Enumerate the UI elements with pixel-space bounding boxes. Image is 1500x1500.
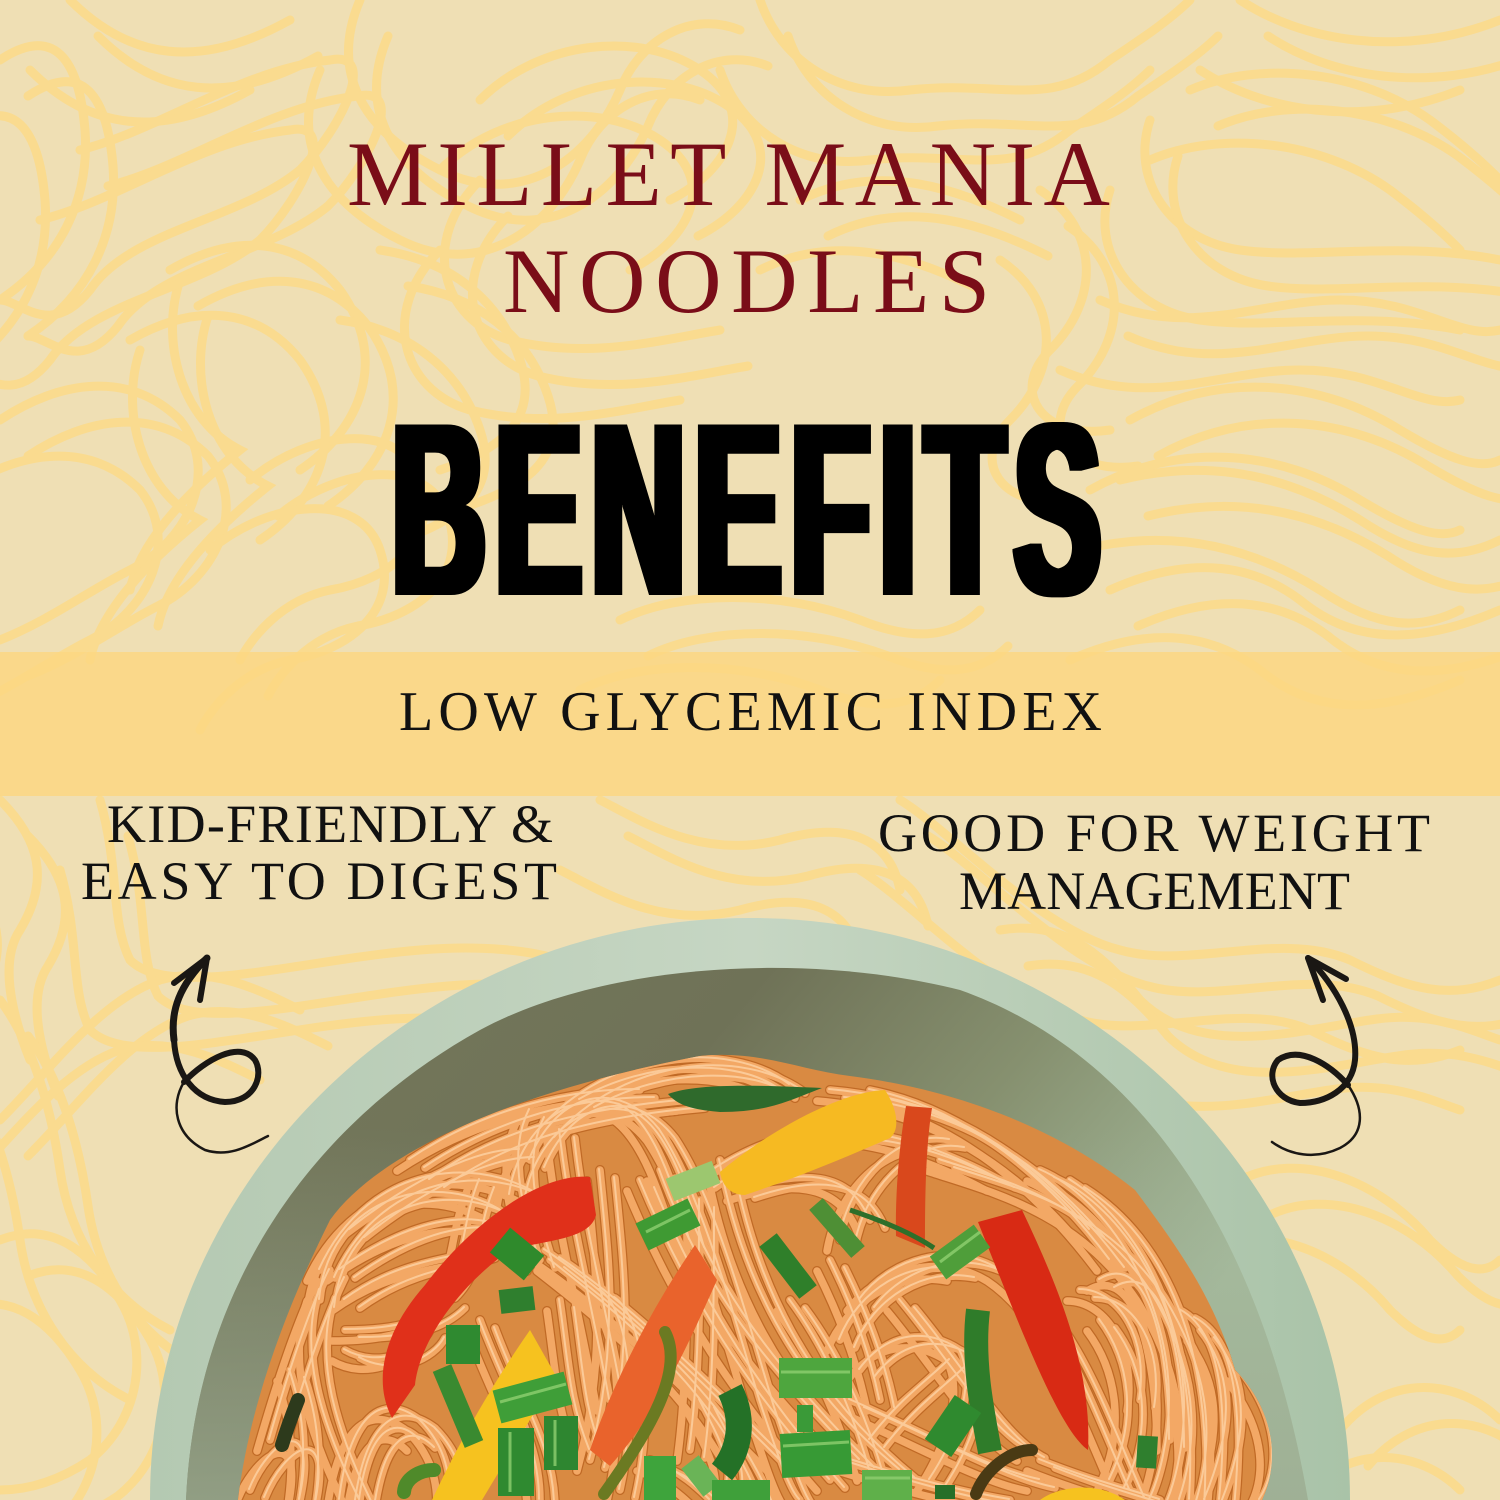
- vegetable: thin red pepper: [896, 1106, 932, 1248]
- icon: left curly arrow: [173, 958, 268, 1152]
- vegetable: large red pepper left: [383, 1177, 596, 1418]
- heading: Benefits: BENEFITS: [392, 373, 1110, 646]
- title: Millet Mania Noodles: MILLET MANIA: [347, 123, 1110, 225]
- benefit: good for weight management: [878, 803, 1430, 921]
- vegetable: yellow pepper bottom: [432, 1330, 556, 1500]
- benefit: good for weight management: GOOD FOR WEIGHT: [878, 803, 1430, 863]
- noodle pile: [230, 1040, 1290, 1500]
- vegetable: yellow pepper: [720, 1090, 896, 1195]
- vegetable: basil leaf: [668, 1086, 822, 1112]
- icon: right curly arrow: [1272, 958, 1360, 1155]
- title: Millet Mania Noodles: NOODLES: [503, 230, 990, 332]
- benefit: good for weight management: MANAGEMENT: [959, 861, 1350, 921]
- bowl with noodles: [150, 918, 1350, 1500]
- benefit: kid-friendly and easy to digest: KID-FRIENDLY &: [107, 794, 553, 854]
- band: low glycemic index: [0, 652, 1500, 796]
- vegetable: yellow pepper bottom right: [1040, 1488, 1125, 1500]
- bowl inner wall: [186, 968, 1308, 1500]
- benefit: kid-friendly and easy to digest: [81, 794, 557, 911]
- vegetable: spring onions: [442, 1172, 1148, 1500]
- vegetable: orange pepper strip: [590, 1245, 717, 1466]
- spring onion highlights: [500, 1210, 980, 1492]
- benefit: low glycemic index: LOW GLYCEMIC INDEX: [399, 681, 1102, 743]
- bowl inner wall shading: [186, 1198, 1308, 1500]
- vegetable: red pepper right: [978, 1210, 1088, 1450]
- benefit: kid-friendly and easy to digest: EASY TO DIGEST: [81, 851, 557, 911]
- title: Millet Mania Noodles: [347, 123, 1110, 332]
- vegetable: chilli strips: [282, 1332, 1032, 1494]
- bowl rim: [150, 918, 1350, 1500]
